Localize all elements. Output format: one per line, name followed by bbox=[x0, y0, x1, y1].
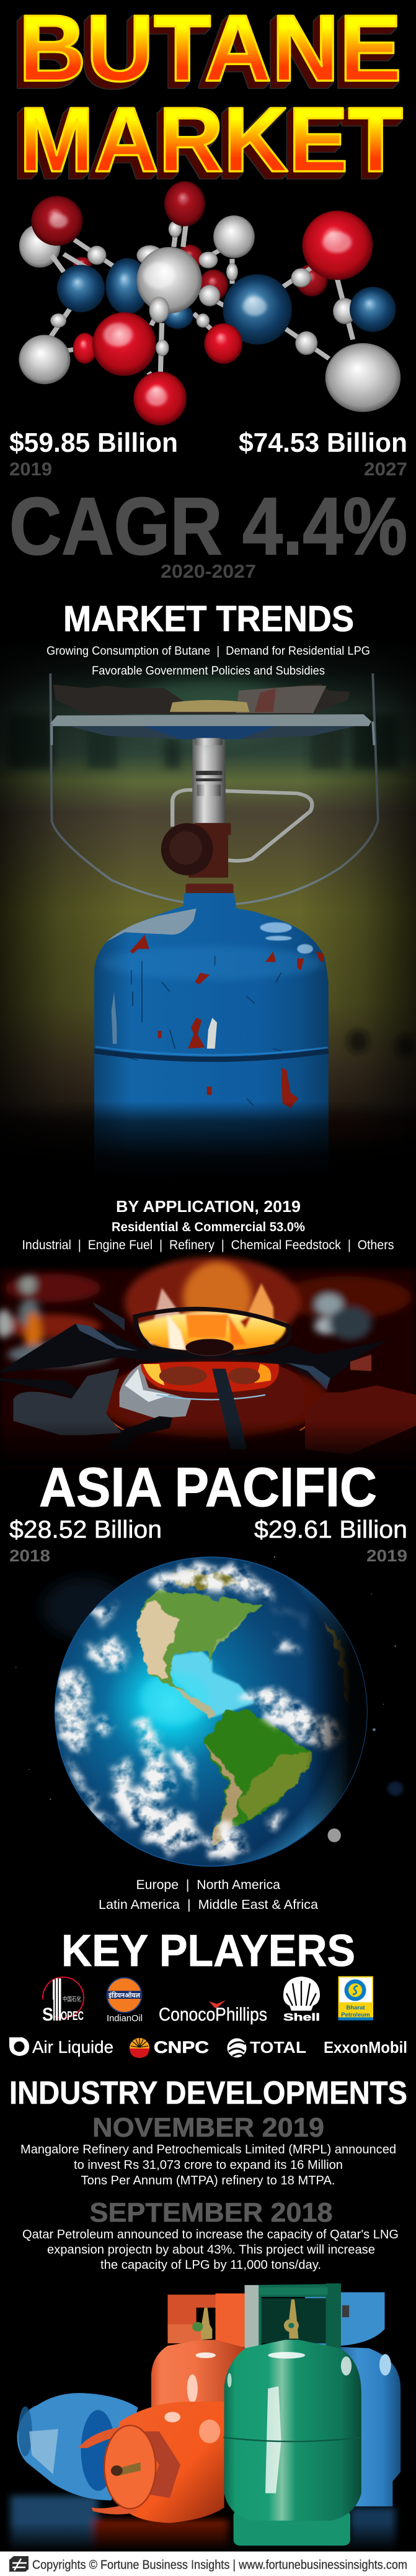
logo: Sinopec: OPEC bbox=[61, 2009, 84, 2023]
text: market trend drivers: Growing Consumption of Butane | Demand for Residential LPG bbox=[46, 645, 370, 658]
logo: Bharat Petroleum: Bharat bbox=[346, 2004, 365, 2011]
logo: CNPC: CNPC bbox=[154, 2038, 209, 2057]
sub: Fortune Business Insights logo bbox=[9, 2556, 29, 2572]
logo: Sinopec: S bbox=[42, 2004, 53, 2025]
text: by application: Industrial | Engine Fuel | Refinery | Chemical Feedstock | Others bbox=[22, 1238, 394, 1252]
stat: Asia Pacific 2018: $28.52 Billion bbox=[9, 1516, 162, 1543]
logo: Total bbox=[227, 2038, 306, 2058]
main title: Butane Market bbox=[19, 0, 403, 191]
logo: CNPC bbox=[130, 2038, 209, 2058]
development: September 2018: SEPTEMBER 2018 bbox=[89, 2197, 332, 2228]
sub: handle and valve bbox=[161, 728, 312, 895]
illustration: butane molecule bbox=[19, 181, 401, 425]
text: by application: BY APPLICATION, 2019 bbox=[116, 1197, 301, 1216]
sub: continents bbox=[135, 1570, 352, 1846]
development: November 2019: to invest Rs 31,073 crore to expand its 16 Million bbox=[74, 2158, 343, 2172]
stat: 2019 market value bbox=[9, 428, 178, 480]
development: November 2019: Mangalore Refinery and Petrochemicals Limited (MRPL) announced bbox=[20, 2143, 396, 2156]
text: other regions: Europe | North America bbox=[136, 1878, 280, 1892]
sub: blue bottle body bbox=[94, 893, 329, 1208]
stat: Asia Pacific 2019 bbox=[254, 1516, 407, 1565]
sub: cast iron grate bbox=[0, 1302, 387, 1398]
logo: Air Liquide: Air Liquide bbox=[32, 2037, 113, 2057]
illustration: LPG cylinders bbox=[0, 2284, 416, 2552]
sub: orange standing cylinder bbox=[151, 2294, 247, 2408]
logo: IndianOil bbox=[107, 1978, 143, 2024]
sub: blue lying cylinder bbox=[17, 2393, 138, 2500]
text: other regions bbox=[99, 1878, 318, 1912]
development: November 2019 bbox=[20, 2112, 396, 2188]
stat: 2027 market value: $74.53 Billion bbox=[239, 428, 407, 458]
sub: burner bbox=[95, 1362, 329, 1438]
logo: Shell: Shell bbox=[283, 2011, 320, 2023]
sub: orange lying cylinder bbox=[78, 2402, 224, 2523]
logo: IndianOil: इंडियनऑयल bbox=[108, 1991, 141, 1999]
stat: Asia Pacific 2019: 2019 bbox=[366, 1546, 407, 1565]
logo: ExxonMobil: ExxonMobil bbox=[324, 2038, 407, 2057]
sub: green front cylinder bbox=[223, 2284, 361, 2546]
text: market trend drivers: Favorable Government Policies and Subsidies bbox=[92, 665, 325, 678]
development: November 2019: Tons Per Annum (MTPA) refinery to 18 MTPA. bbox=[81, 2174, 335, 2188]
sub: wire pot-stand bbox=[50, 673, 378, 904]
photo: gas stove flame bbox=[0, 1257, 416, 1466]
text: by application: Residential & Commercial 53.0% bbox=[112, 1220, 305, 1234]
heading: market trends: MARKET TRENDS bbox=[63, 599, 354, 639]
logo: Bharat Petroleum: Petroleum bbox=[341, 2012, 370, 2018]
stat: Asia Pacific 2018: 2018 bbox=[9, 1546, 50, 1565]
logo: Shell bbox=[283, 1977, 320, 2023]
sub: floor reflection bbox=[11, 2495, 396, 2552]
sub: cloud cover bbox=[56, 1565, 345, 1860]
logo: Sinopec: 中国石化 bbox=[63, 1995, 81, 2003]
development: September 2018: Qatar Petroleum announced to increase the capacity of Qatar's LNG bbox=[22, 2228, 399, 2242]
sub: blue standing cylinder bbox=[305, 2292, 401, 2506]
stat: 2019 market value: $59.85 Billion bbox=[9, 428, 178, 458]
illustration: planet Earth bbox=[15, 1556, 403, 1869]
sub: paint chips bbox=[130, 935, 324, 1108]
stat: 2027 market value bbox=[239, 428, 407, 480]
sub: moon bbox=[327, 1828, 341, 1842]
sub: burner head and pan support bbox=[50, 679, 374, 745]
heading: Asia Pacific: ASIA PACIFIC bbox=[39, 1456, 377, 1518]
text: by application bbox=[22, 1197, 394, 1252]
logo: Total: TOTAL bbox=[250, 2038, 306, 2057]
footer bar bbox=[0, 2552, 416, 2576]
logo: Sinopec bbox=[37, 1977, 84, 2025]
main title: Butane Market: MARKET bbox=[19, 89, 403, 191]
stat: Asia Pacific 2018 bbox=[9, 1516, 162, 1565]
logo: ConocoPhillips: ConocoPhillips bbox=[159, 2004, 267, 2025]
stat: 2019 market value: 2019 bbox=[9, 459, 52, 480]
stat: CAGR: 2020-2027 bbox=[161, 560, 256, 582]
text: other regions: Latin America | Middle East & Africa bbox=[99, 1898, 318, 1912]
sub: shallow caribbean water bbox=[170, 1651, 255, 1717]
text: market trend drivers bbox=[46, 645, 370, 678]
development: November 2019: NOVEMBER 2019 bbox=[92, 2112, 324, 2143]
logo: IndianOil: IndianOil bbox=[107, 2013, 143, 2024]
heading: key players: KEY PLAYERS bbox=[61, 1926, 355, 1976]
development: September 2018: expansion projectn by about 43%. This project will increase bbox=[47, 2243, 375, 2256]
sub: cooktop plate bbox=[13, 1355, 416, 1454]
development: September 2018 bbox=[22, 2197, 399, 2272]
photo: camping gas bottle with burner bbox=[0, 639, 416, 1216]
stat: Asia Pacific 2019: $29.61 Billion bbox=[254, 1516, 407, 1543]
sub: flames bbox=[138, 1283, 286, 1356]
logo: Bharat Petroleum bbox=[339, 1976, 373, 2021]
development: September 2018: the capacity of LPG by 11,000 tons/day. bbox=[100, 2258, 321, 2272]
stat: 2027 market value: 2027 bbox=[364, 459, 407, 480]
